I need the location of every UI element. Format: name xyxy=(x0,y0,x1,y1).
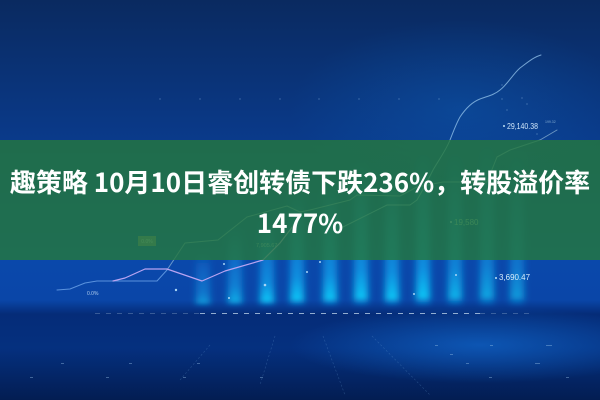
dashed baseline xyxy=(200,312,480,314)
green title band xyxy=(0,140,600,260)
line: purple highlight xyxy=(113,217,300,281)
markers xyxy=(450,125,505,279)
label: 7,905.67: 7,905.67 xyxy=(256,243,277,249)
title: 趣策略 10月10日睿创转债下跌236%，转股溢价率 xyxy=(10,163,590,200)
stars xyxy=(175,261,457,299)
glow columns xyxy=(196,140,524,306)
line: main upward curve xyxy=(343,55,541,227)
data labels xyxy=(87,120,556,297)
tag: percent box: 0.0% xyxy=(141,239,153,245)
floor perspective lines xyxy=(180,336,430,395)
tag: percent box xyxy=(138,236,156,246)
label: 29,140.38: 29,140.38 xyxy=(507,122,538,131)
line: secondary curve xyxy=(167,130,557,270)
rising market lines xyxy=(57,55,557,290)
title: 1477% xyxy=(257,204,343,241)
label: 3,690.47: 3,690.47 xyxy=(499,273,531,282)
label: 19,580: 19,580 xyxy=(454,218,479,227)
line: lower blue xyxy=(57,270,167,290)
label: small stats right: 199.32 xyxy=(545,120,556,124)
title xyxy=(10,163,590,241)
floor sparkle dots xyxy=(30,345,569,378)
label: 0.0%: 0.0% xyxy=(87,291,99,297)
